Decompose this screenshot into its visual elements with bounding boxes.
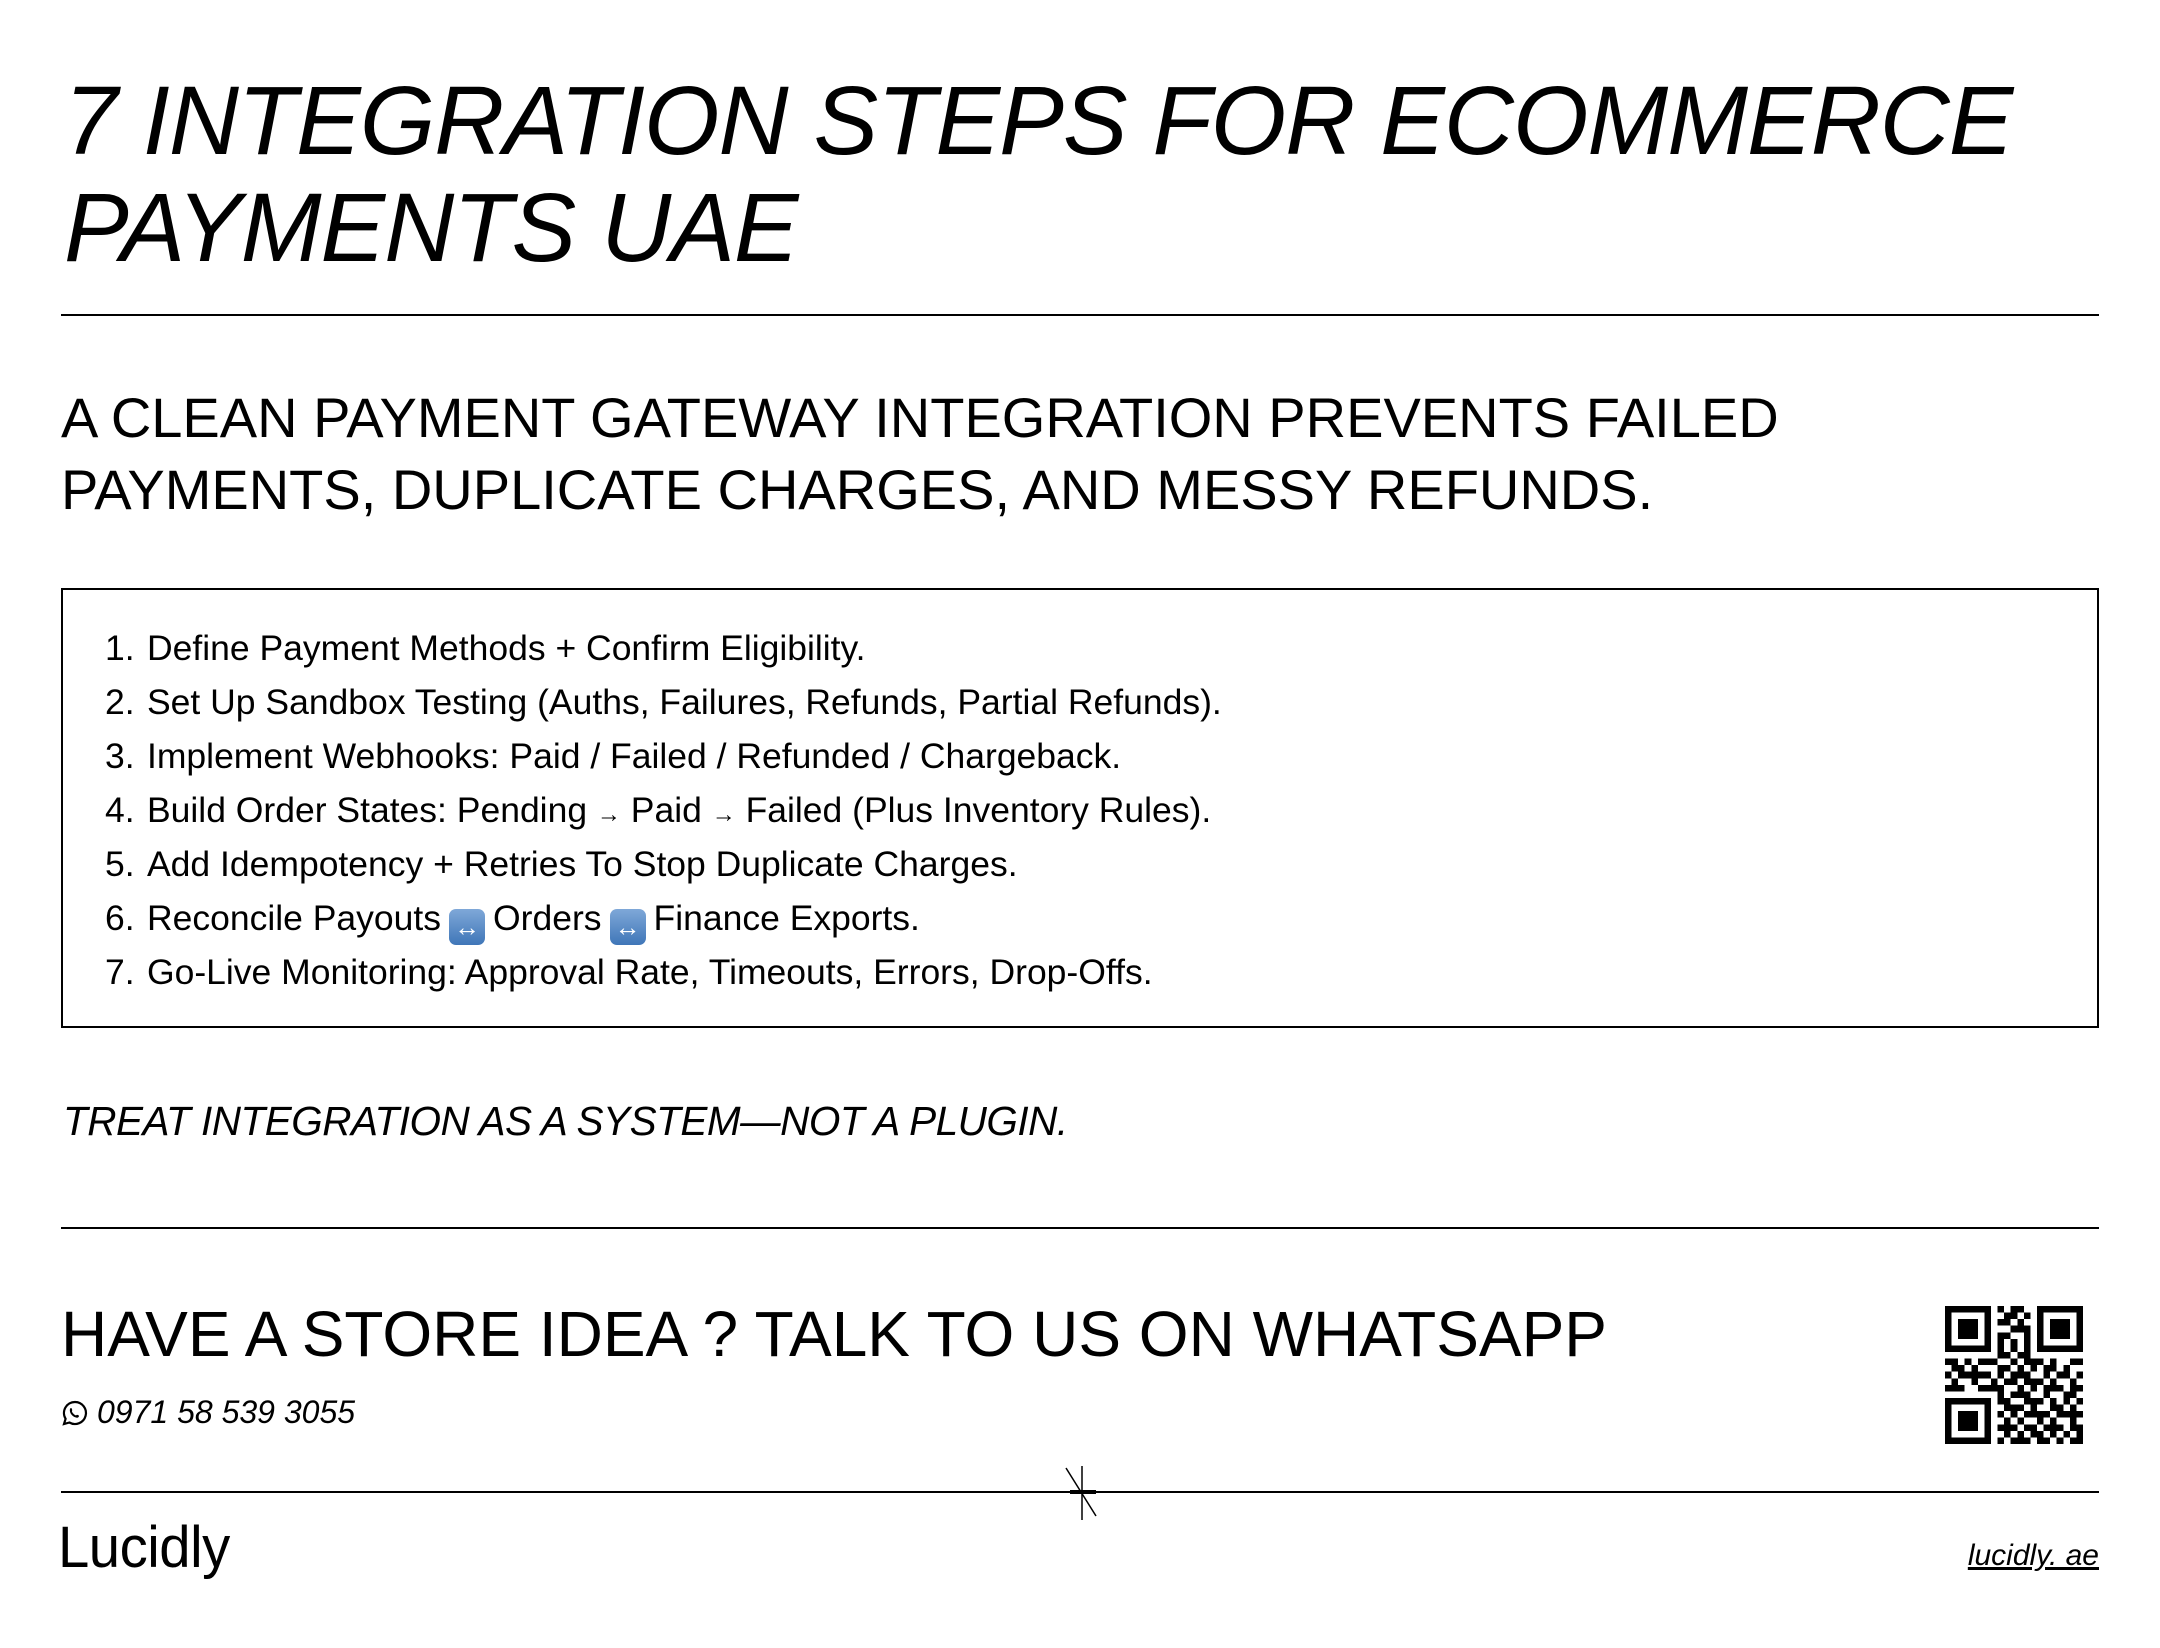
title: 7 INTEGRATION STEPS FOR ECOMMERCE [64,66,2012,175]
CTA heading: HAVE A STORE IDEA ? TALK TO US ON WHATSAPP [61,1298,1607,1370]
icon: whatsapp [62,1400,88,1426]
steps: 4. [105,790,135,830]
steps: 1. [105,628,135,668]
steps: Implement Webhooks: Paid / Failed / Refunded / Chargeback. [147,736,1121,776]
steps: Go-Live Monitoring: Approval Rate, Timeouts, Errors, Drop-Offs. [147,952,1153,992]
steps: 5. [105,844,135,884]
steps: ↔ [454,912,480,942]
QR code [1945,1306,2083,1444]
subtitle [61,386,1779,521]
steps: Add Idempotency + Retries To Stop Duplicate Charges. [147,844,1018,884]
steps: 6. [105,898,135,938]
steps: Reconcile Payouts Orders Finance Exports. [147,898,920,938]
panel: steps list [61,588,2099,1028]
steps: 7. [105,952,135,992]
title [64,66,2014,282]
steps: Set Up Sandbox Testing (Auths, Failures, Refunds, Partial Refunds). [147,682,1222,722]
steps: 2. [105,682,135,722]
icon: star mark [1065,1466,1097,1520]
subtitle: A CLEAN PAYMENT GATEWAY INTEGRATION PREVENTS FAILED [61,386,1779,449]
logo: Lucidly: Lucidly [58,1515,230,1580]
steps: Build Order States: Pending → Paid → Failed (Plus Inventory Rules). [147,790,1211,830]
tagline: TREAT INTEGRATION AS A SYSTEM—NOT A PLUGIN. [63,1098,1068,1144]
subtitle: PAYMENTS, DUPLICATE CHARGES, AND MESSY REFUNDS. [61,458,1653,521]
phone contact: 0971 58 539 3055 [97,1394,355,1430]
steps: 3. [105,736,135,776]
title: PAYMENTS UAE [64,173,798,282]
website link: lucidly. ae [1968,1539,2099,1572]
steps [105,628,1222,992]
steps: Define Payment Methods + Confirm Eligibility. [147,628,866,668]
steps: ↔ [615,912,641,942]
